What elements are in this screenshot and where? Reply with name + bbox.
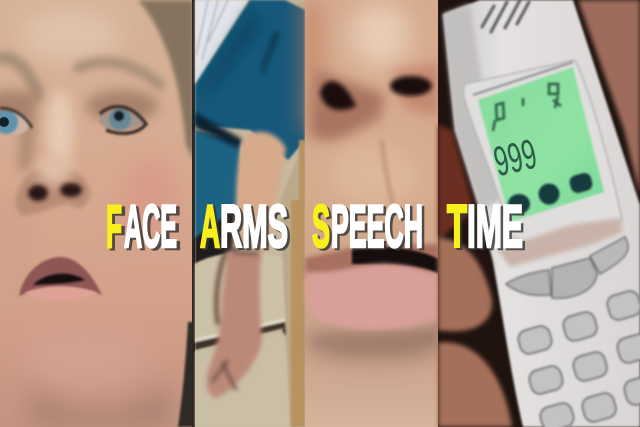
icon: left eye xyxy=(0,108,32,135)
word: Time xyxy=(447,193,526,262)
hair xyxy=(138,0,194,160)
phone body xyxy=(443,0,640,427)
word: Arms xyxy=(200,193,290,262)
panel: speech xyxy=(305,0,440,427)
teal top xyxy=(195,0,305,240)
status icons xyxy=(493,84,561,131)
chair cushion xyxy=(195,140,305,427)
word: Face xyxy=(106,193,180,262)
word: Time: T xyxy=(447,193,467,260)
wood strip xyxy=(291,200,305,427)
eyebrows xyxy=(0,58,160,95)
icon: right nostril xyxy=(390,76,432,96)
title: Face Arms Speech Time: PEECH xyxy=(331,193,423,260)
keypad xyxy=(516,289,640,427)
mouth xyxy=(19,257,102,300)
white striped shirt xyxy=(195,0,248,85)
title: Face Arms Speech Time xyxy=(106,193,526,262)
screen bezel xyxy=(463,60,622,243)
divider strip xyxy=(192,0,195,427)
icon: right eye xyxy=(99,107,146,133)
softkey icons xyxy=(508,171,594,214)
word: Time: T xyxy=(450,195,470,262)
speaker grille xyxy=(482,0,529,32)
word: Arms: A xyxy=(202,195,222,262)
eye sockets xyxy=(0,90,158,170)
hand xyxy=(207,250,262,398)
logo strip xyxy=(498,218,622,267)
word: Arms: RMS xyxy=(222,195,290,262)
word: Arms: A xyxy=(200,193,220,260)
nose underside xyxy=(310,70,385,140)
neck shadow xyxy=(178,322,194,427)
title: Face Arms Speech Time: ACE xyxy=(124,193,177,260)
screen xyxy=(478,67,604,222)
philtrum line xyxy=(382,140,396,215)
dark seat gap xyxy=(195,205,240,264)
title: Face Arms Speech Time: ACE xyxy=(126,195,180,262)
title: Face Arms Speech Time: PEECH xyxy=(334,195,426,262)
word: Face: F xyxy=(106,193,122,260)
icon: left nostril xyxy=(320,81,356,110)
word: Time: IME xyxy=(467,193,523,260)
panel: face xyxy=(0,0,194,427)
word: Arms: RMS xyxy=(220,193,288,260)
word: Speech xyxy=(312,193,426,262)
999 number: 999 xyxy=(489,130,541,185)
word: Time: IME xyxy=(470,195,526,262)
panel: phone xyxy=(438,0,640,427)
word: Speech: S xyxy=(312,193,330,260)
word: Speech: S xyxy=(314,195,332,262)
nose xyxy=(16,90,90,216)
navigation keys xyxy=(506,237,628,298)
word: Face: F xyxy=(108,195,126,262)
upper arm xyxy=(232,132,286,250)
mouth xyxy=(305,244,440,349)
panel: arms xyxy=(195,0,305,427)
hand: fingers xyxy=(438,0,640,427)
